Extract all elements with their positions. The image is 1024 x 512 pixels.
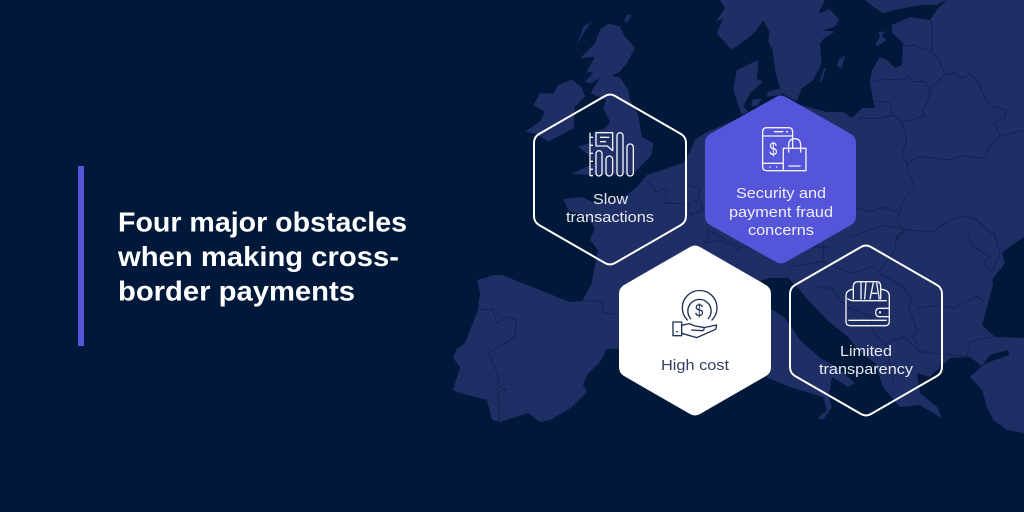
country borders [478,20,1024,422]
hexagon: security and fraud [705,96,856,264]
label: transparency [819,361,914,378]
hexagon: limited transparency [790,246,942,416]
icon: phone and shopping bag: $ [769,139,778,160]
Sea of Marmara [982,350,1009,366]
label: High cost [661,357,730,374]
icon: hand holding coin [673,290,717,338]
label: Slow [593,191,628,208]
title: when making cross- [117,241,399,272]
icon: ruler and bars [590,133,633,176]
dotted land texture [453,5,1024,433]
Italy [740,308,855,420]
Ireland and Great Britain [525,15,653,175]
icon: hand holding coin: $ [695,301,703,321]
title: border payments [118,276,355,306]
icon: phone and shopping bag [763,128,806,171]
accent bar [78,166,84,346]
Baltics, Poland, Belarus, Ukraine [850,20,1024,240]
label [729,185,833,239]
Scandinavia and Denmark [716,0,845,115]
label: transactions [566,209,654,226]
map of Europe [453,0,1024,433]
Finland tip and Baltic islands [865,0,947,47]
Iberia [478,301,618,422]
label: payment fraud [729,204,833,221]
label: concerns [748,222,814,239]
label [819,343,914,378]
icon: wallet [846,282,889,326]
hexagon: high cost [619,246,771,416]
label: Security and [736,185,826,202]
hexagon: slow transactions [534,94,686,264]
label: Limited [840,343,892,360]
Balkans and central Europe [788,230,1000,383]
title [117,206,407,306]
label [566,191,654,226]
France and Benelux [647,180,740,250]
mainland Europe, Iberia and Turkey [453,0,1024,433]
title: Four major obstacles [118,206,407,238]
